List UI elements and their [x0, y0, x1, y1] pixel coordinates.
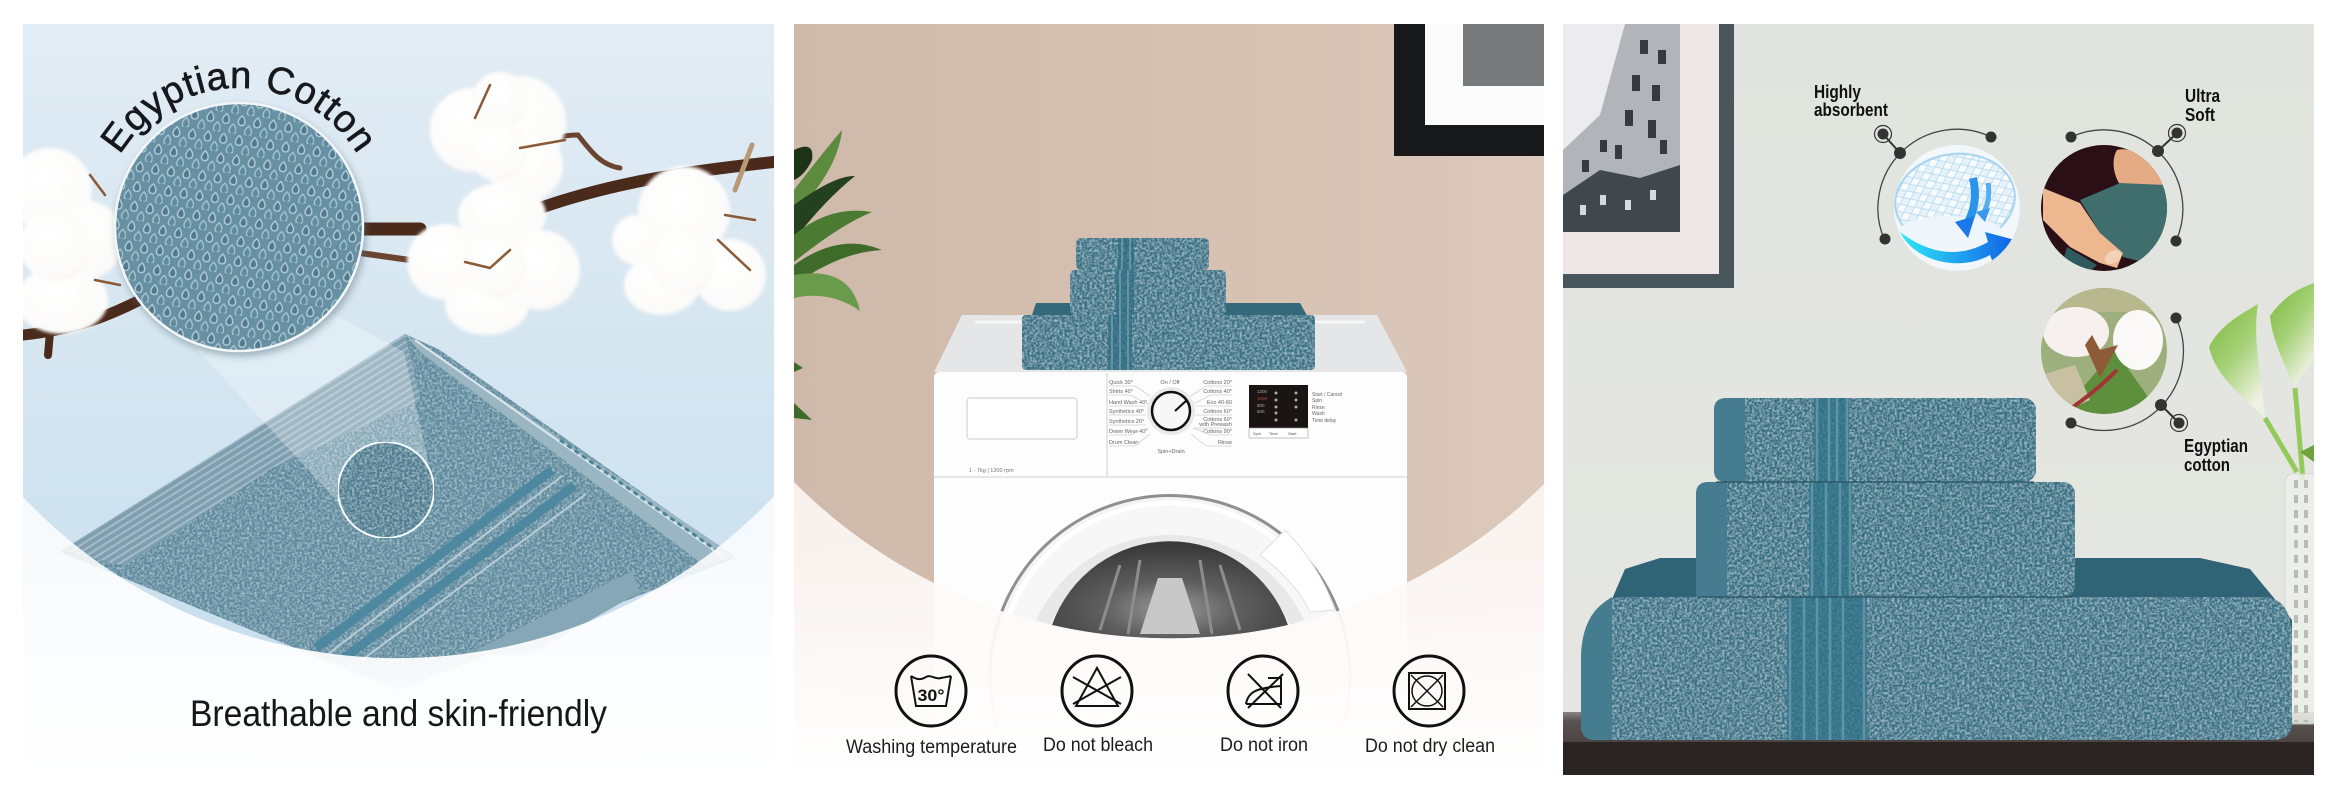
towel woven borders: [1581, 398, 1745, 740]
label: Highly absorbent: absorbent: [1814, 100, 1888, 120]
large towel: [1022, 315, 1315, 370]
label: Highly absorbent: [1814, 82, 1888, 120]
soft pointer: [2066, 124, 2186, 246]
building photo: [1563, 24, 1680, 232]
icon: do not dry clean: [1394, 656, 1464, 726]
label: Highly absorbent: Highly: [1814, 82, 1861, 102]
panel: washing care: [794, 24, 1545, 775]
display panel: Time: [1269, 431, 1279, 436]
wall background: [794, 24, 1544, 583]
status labels: Time delay: [1312, 418, 1337, 424]
program labels: Hand Wash 40°: [1109, 400, 1147, 406]
picture frame: [1394, 24, 1545, 156]
middle towel: [1696, 482, 2075, 597]
program labels: Eco 40-60: [1207, 400, 1232, 406]
label: Ultra Soft: Ultra: [2185, 86, 2221, 106]
icon: washing temperature: 30°: [918, 686, 945, 705]
white overlay below arc: [23, 496, 774, 775]
program labels: Drum Clean: [1109, 440, 1138, 446]
care labels: Do not iron: [1220, 735, 1308, 756]
plant: calla leaves: [2209, 283, 2320, 724]
towel contact shadows: [1698, 482, 2073, 597]
program labels: Cottons 60°: [1203, 417, 1232, 423]
small towel: [1076, 238, 1209, 270]
cotton branch: [23, 135, 774, 355]
program labels: Cottons 60°: [1203, 409, 1232, 415]
small magnify circle: [338, 442, 434, 538]
absorbent image: [1889, 145, 2021, 271]
translucent magnify beam: [186, 312, 430, 502]
feature: highly absorbent: [1814, 82, 2021, 271]
program dial: [1109, 386, 1232, 446]
cotton bolls: [8, 72, 766, 335]
washing machine: [934, 315, 1407, 638]
capacity label: 1 - 7kg | 1200 rpm: [969, 468, 1014, 474]
status labels: Wash: [1312, 411, 1325, 417]
soft arc: [2071, 130, 2183, 241]
cotton arc: [2071, 318, 2183, 430]
panel: Egyptian cotton closeup: [23, 24, 774, 734]
middle towel: [1070, 270, 1226, 315]
program labels: Quick 30°: [1109, 380, 1133, 386]
care labels: Do not dry clean: [1365, 736, 1495, 757]
small towel: [1714, 398, 2036, 482]
label: Egyptian cotton: [2184, 436, 2248, 475]
machine body: [934, 372, 1407, 611]
cotton husks: [90, 85, 755, 285]
drum baffle: [1140, 578, 1200, 634]
program labels: On / Off: [1160, 380, 1180, 386]
status labels: [1312, 392, 1342, 424]
towel stack on machine: [1022, 238, 1315, 370]
panel background: [23, 24, 774, 648]
status labels: Start / Cancel: [1312, 392, 1342, 398]
soft touch image: [2041, 145, 2167, 271]
towel woven left border: [62, 334, 420, 566]
label: Egyptian cotton: Egyptian: [2184, 436, 2248, 456]
plant leaves: [794, 130, 882, 420]
display panel: 1000: [1257, 396, 1268, 401]
panel seams: [934, 373, 1407, 477]
display panel: Start: [1288, 431, 1297, 436]
care labels: Washing temperature: [846, 737, 1017, 758]
program labels: Spin+Drain: [1157, 449, 1185, 455]
program labels: [1109, 380, 1232, 455]
shelf: [1563, 712, 2314, 775]
program labels: Synthetics 40°: [1109, 409, 1144, 415]
display panel: 1200: [1257, 389, 1268, 394]
large bath towel: [1581, 597, 2292, 740]
drum interior: [1052, 541, 1288, 638]
display panel: [1249, 385, 1308, 438]
caption: Breathable and skin-friendly: Breathable and skin-friendly: [190, 693, 607, 734]
feature: Egyptian cotton: [2041, 288, 2248, 475]
display panel: Spin: [1253, 431, 1261, 436]
program labels: Down Wear 40°: [1109, 429, 1147, 435]
magnifier shadow: [116, 106, 366, 356]
label: Egyptian cotton: cotton: [2184, 455, 2230, 475]
large towel back: [1022, 303, 1315, 345]
picture frame: [1563, 24, 1734, 288]
icon: do not bleach: [1062, 656, 1132, 726]
label: Ultra Soft: [2185, 86, 2221, 125]
program labels: Cottons 20°: [1203, 380, 1232, 386]
panel: towel set features: [1563, 24, 2320, 775]
care labels: [846, 735, 1495, 758]
towel folded flap: [466, 571, 640, 655]
program labels: with Prewash: [1198, 422, 1232, 428]
care labels: Do not bleach: [1043, 735, 1153, 756]
program labels: Shirts 40°: [1109, 389, 1133, 395]
icon: washing temperature: [896, 656, 966, 726]
towel body: [60, 334, 735, 690]
machine top: [934, 315, 1407, 372]
towel woven right border: [405, 334, 735, 566]
icon: do not iron: [1228, 656, 1298, 726]
display panel: 600: [1257, 409, 1265, 414]
label: Ultra Soft: Soft: [2185, 105, 2215, 125]
door handle: [1260, 530, 1335, 612]
towel dobby stripes: [316, 470, 586, 660]
towel stripe bands: [1787, 398, 1867, 740]
feature: ultra soft: [2041, 86, 2221, 271]
towel stripes: [1108, 238, 1134, 370]
program labels: Cottons 90°: [1203, 429, 1232, 435]
towel corner: [60, 334, 735, 690]
cotton plant image: [2041, 288, 2167, 414]
large towel back: [1590, 558, 2292, 650]
curved heading: Egyptian Cotton: Egyptian Cotton: [100, 65, 371, 153]
wall background: [1563, 24, 2314, 775]
absorbent arc: [1878, 129, 1991, 241]
magnifier circle: terry loops: [115, 103, 363, 351]
program labels: Rinse: [1218, 440, 1232, 446]
glass vase: [2285, 474, 2320, 724]
absorbent pointer: [1874, 126, 1996, 244]
program labels: Synthetics 20°: [1109, 419, 1144, 425]
display panel: 800: [1257, 403, 1265, 408]
detergent drawer: [967, 398, 1077, 439]
program labels: Cottons 40°: [1203, 389, 1232, 395]
status labels: Rinse: [1312, 405, 1325, 411]
cotton pointer: [2066, 312, 2188, 432]
machine door: [1000, 494, 1340, 638]
cream overlay below arc: [794, 482, 1544, 775]
status labels: Spin: [1312, 398, 1322, 404]
